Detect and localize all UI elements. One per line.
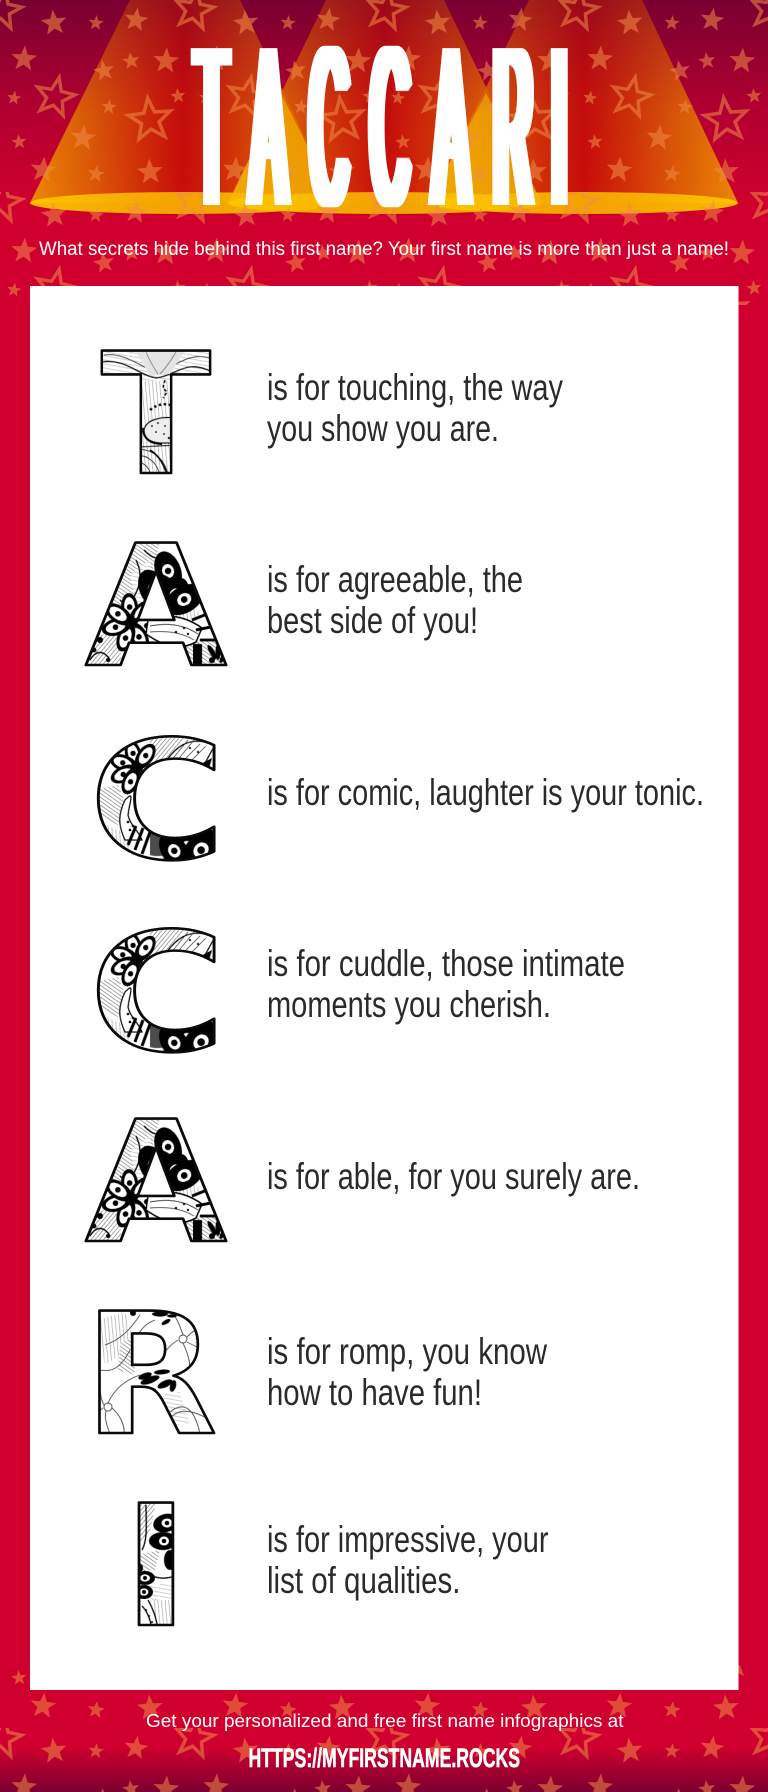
panel: white content card — [30, 286, 738, 1690]
subtitle: What secrets hide behind this first name? Your first name is more than just a name! — [39, 239, 729, 260]
text: A description — [267, 559, 523, 641]
row C — [89, 706, 704, 897]
spotlight: left cone — [30, 0, 336, 203]
text: T description: you show you are. — [267, 408, 499, 449]
text: R description: is for romp, you know — [267, 1331, 547, 1372]
icon: mandala letter A: A — [85, 1085, 227, 1281]
text: I description — [267, 1519, 548, 1601]
footer url: HTTPS://MYFIRSTNAME.ROCKS — [248, 1743, 520, 1773]
spotlight: right cone — [429, 0, 738, 203]
icon: mandala letter R: R — [84, 1277, 218, 1473]
text: A description: is for agreeable, the — [267, 559, 523, 600]
icon: mandala letter T: T — [101, 317, 211, 513]
icon: mandala letter C: C — [89, 706, 226, 897]
text: second C description: moments you cherish. — [267, 984, 551, 1025]
text: second C description — [267, 943, 625, 1025]
row A second — [85, 1085, 640, 1281]
text: T description: is for touching, the way — [267, 367, 563, 408]
icon: mandala letter I: I — [122, 1469, 190, 1665]
text: R description — [267, 1331, 547, 1413]
spotlight floor ellipses — [30, 192, 738, 214]
row I — [122, 1469, 548, 1665]
text: T description — [267, 367, 563, 449]
row A — [85, 509, 523, 705]
icon: mandala letter C: C — [89, 898, 226, 1089]
spotlights: three cones with floor ellipses — [30, 0, 738, 214]
star pattern: bottom band — [0, 1665, 768, 1792]
row C second — [89, 898, 625, 1089]
spotlight overlap: left — [233, 94, 314, 194]
footer line: Get your personalized and free first name infographics at — [146, 1710, 624, 1731]
row T — [101, 317, 563, 513]
text: I description: is for impressive, your — [267, 1519, 548, 1560]
spotlight: middle cone — [228, 0, 542, 203]
text: I description: list of qualities. — [267, 1560, 460, 1601]
icon: mandala letter A: A — [85, 509, 227, 705]
star pattern: top band — [0, 0, 768, 305]
text: A description: best side of you! — [267, 600, 478, 641]
row R — [84, 1277, 547, 1473]
title: TACCARI — [196, 0, 567, 255]
text: second A description: is for able, for you surely are. — [267, 1156, 640, 1197]
text: R description: how to have fun! — [267, 1372, 482, 1413]
text: second C description: is for cuddle, those intimate — [267, 943, 625, 984]
spotlight overlap: right — [446, 93, 537, 194]
